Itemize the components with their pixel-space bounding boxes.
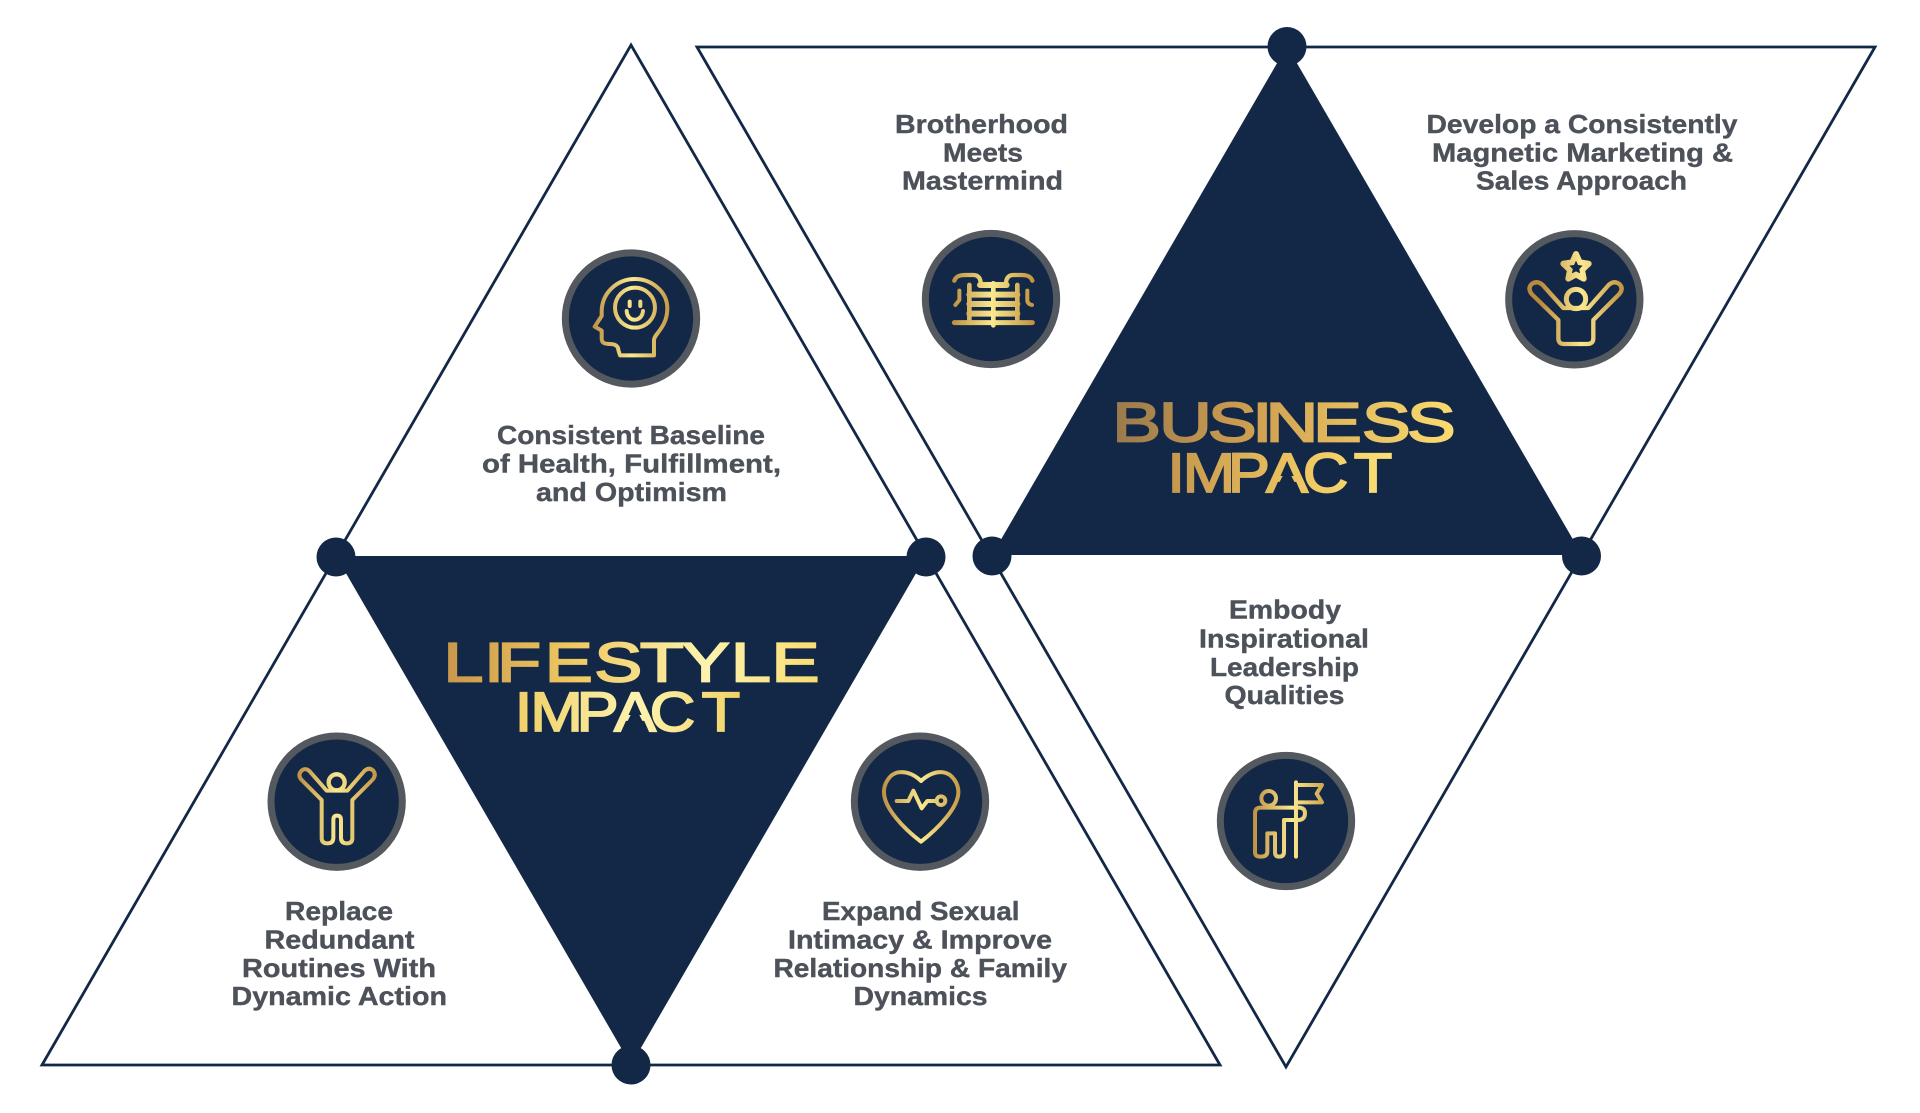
text: embody inspirational leadership: Qualities bbox=[1224, 680, 1344, 710]
text: replace redundant routines bbox=[232, 896, 447, 1011]
node: lifestyle left bbox=[316, 538, 356, 576]
node: business left bbox=[972, 536, 1012, 576]
text: replace redundant routines: Redundant bbox=[264, 924, 415, 954]
node: business top bbox=[1268, 27, 1306, 66]
text: expand sexual intimacy: Relationship & Family bbox=[774, 953, 1068, 983]
text: develop magnetic marketing: Sales Approach bbox=[1476, 166, 1687, 196]
icon: heart with pulse bbox=[854, 736, 986, 867]
text: brotherhood meets mastermind bbox=[895, 109, 1068, 196]
panel: lifestyle outer triangle bbox=[42, 45, 1220, 1065]
node: lifestyle right bbox=[906, 538, 946, 576]
text: brotherhood meets mastermind: Brotherhood bbox=[895, 109, 1068, 139]
text: replace redundant routines: Dynamic Action bbox=[232, 981, 447, 1011]
text: consistent baseline: of Health, Fulfillment, bbox=[482, 448, 781, 478]
text: replace redundant routines: Replace bbox=[285, 896, 393, 926]
text: embody inspirational leadership: Inspirational bbox=[1199, 624, 1369, 654]
heading: lifestyle impact: LIFESTYLE bbox=[443, 631, 820, 694]
text: develop magnetic marketing: Develop a Consistently bbox=[1426, 109, 1738, 139]
panel: business outer triangle bbox=[697, 47, 1875, 1067]
icon: person with flag bbox=[1220, 755, 1352, 887]
heading: business impact: IMPACT bbox=[1167, 441, 1392, 504]
icon: raised arms person bbox=[271, 736, 402, 867]
text: expand sexual intimacy: Expand Sexual bbox=[822, 896, 1020, 926]
text: consistent baseline: and Optimism bbox=[536, 477, 727, 507]
heading: lifestyle impact: IMPACT bbox=[515, 680, 740, 743]
text: embody inspirational leadership: Leadership bbox=[1210, 652, 1359, 682]
icon: person with star bbox=[1509, 234, 1640, 365]
node: business right bbox=[1562, 536, 1601, 576]
panel: business navy triangle bbox=[992, 46, 1582, 555]
text: embody inspirational leadership: Embody bbox=[1229, 594, 1342, 624]
text: embody inspirational leadership bbox=[1199, 594, 1369, 710]
panel: lifestyle navy inverted triangle bbox=[336, 556, 926, 1065]
heading: lifestyle impact bbox=[443, 631, 820, 743]
heading: business impact: BUSINESS bbox=[1112, 391, 1456, 454]
icon: happy head bbox=[565, 253, 697, 384]
icon: mastermind stack bbox=[925, 233, 1057, 365]
text: brotherhood meets mastermind: Meets bbox=[943, 138, 1023, 168]
text: expand sexual intimacy bbox=[774, 896, 1068, 1011]
text: brotherhood meets mastermind: Mastermind bbox=[902, 166, 1063, 196]
text: expand sexual intimacy: Dynamics bbox=[854, 981, 988, 1011]
heading: business impact bbox=[1112, 391, 1456, 504]
text: develop magnetic marketing: Magnetic Marketing & bbox=[1432, 138, 1733, 168]
text: develop magnetic marketing bbox=[1426, 109, 1738, 196]
text: consistent baseline: Consistent Baseline bbox=[497, 420, 765, 450]
text: expand sexual intimacy: Intimacy & Improve bbox=[788, 924, 1052, 954]
text: consistent baseline bbox=[482, 420, 781, 507]
text: replace redundant routines: Routines With bbox=[242, 953, 436, 983]
node: lifestyle bottom bbox=[612, 1046, 650, 1084]
